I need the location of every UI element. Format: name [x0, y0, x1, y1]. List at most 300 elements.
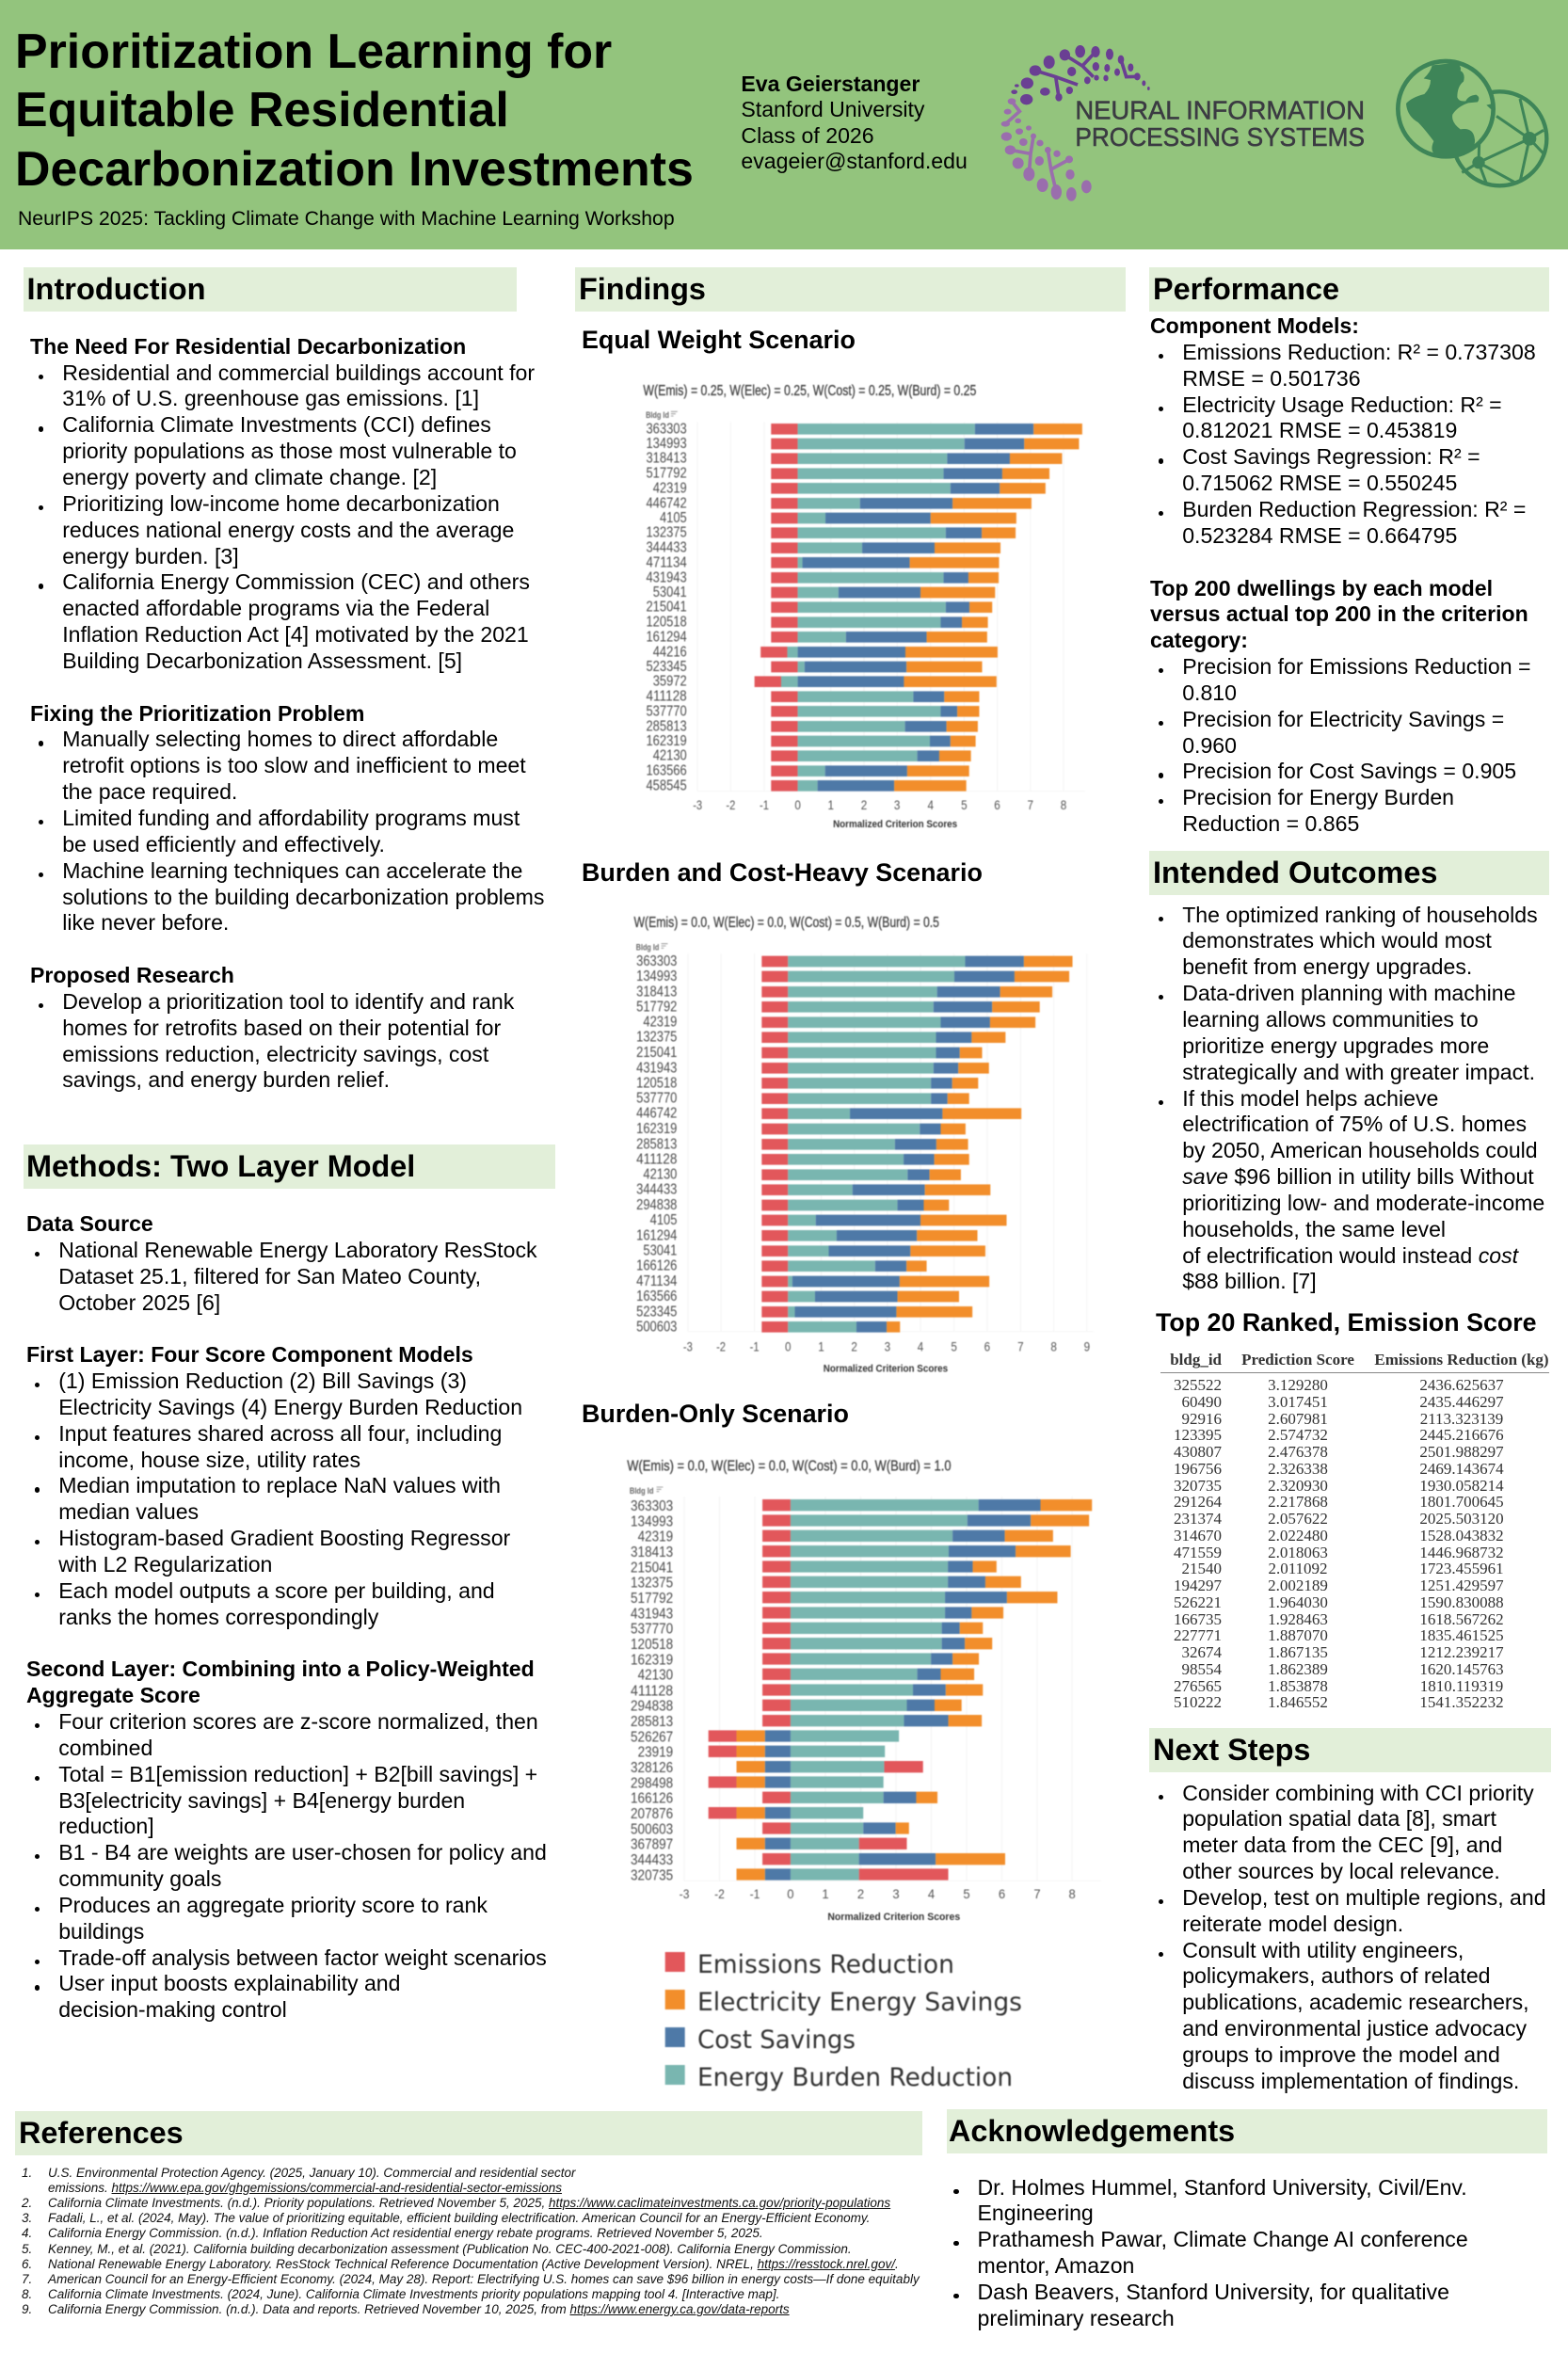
subheading: equal weight: Equal Weight Scenario: [582, 326, 856, 354]
chart: burden and cost-heavy stacked bars: -2: [716, 1339, 726, 1354]
chart: equal weight stacked bars: 2: [861, 798, 867, 813]
title: Equitable Residential: [15, 82, 509, 136]
text: acknowledgements list: [953, 2174, 1468, 2330]
table: top 20 emission scores: 92916: [1182, 1410, 1222, 1428]
chart: equal weight stacked bars: 42130: [653, 747, 687, 763]
chart: burden-only stacked bars: 42319: [638, 1529, 673, 1545]
heading: Introduction: [24, 267, 517, 311]
table: top 20 emission scores: 2.607981: [1268, 1410, 1328, 1428]
text: next steps list: policymakers, authors of related: [1182, 1963, 1491, 1988]
text: introduction content: like never before.: [62, 910, 229, 935]
heading: Next Steps: [1149, 1728, 1551, 1771]
text: performance metrics: Precision for Energy Burden: [1182, 785, 1454, 809]
chart: burden-only stacked bars: 0: [787, 1887, 794, 1902]
title: Decarbonization Investments: [15, 141, 694, 196]
text: reference list: California Energy Commission. (n.d.). Data and reports. Retrieved November 10, 2025, from https://www.energy.ca.gov/data-reports: [48, 2302, 790, 2316]
chart: equal weight stacked bars: [642, 382, 1083, 830]
text: performance metrics: Top 200 dwellings by each model: [1150, 576, 1493, 600]
chart: equal weight stacked bars: 8: [1061, 798, 1066, 813]
author block: [741, 72, 968, 173]
table: top 20 emission scores: 2436.625637: [1419, 1376, 1504, 1394]
text: reference list: [21, 2165, 920, 2316]
text: performance metrics: category:: [1150, 628, 1248, 652]
chart: burden and cost-heavy stacked bars: 8: [1050, 1339, 1057, 1354]
table: top 20 emission scores: 1541.352232: [1419, 1693, 1504, 1711]
text: next steps list: meter data from the CEC [9], and: [1182, 1833, 1502, 1857]
chart: burden and cost-heavy stacked bars: 7: [1017, 1339, 1024, 1354]
chart: burden-only stacked bars: 166126: [631, 1790, 673, 1806]
chart: burden and cost-heavy stacked bars: 215041: [636, 1044, 677, 1061]
text: acknowledgements list: mentor, Amazon: [977, 2253, 1134, 2278]
logo: NeurIPS: [1001, 45, 1365, 201]
heading: Introduction: Introduction: [26, 271, 205, 306]
text: performance metrics: versus actual top 200 in the criterion: [1150, 601, 1528, 626]
text: performance metrics: Cost Savings Regression: R² =: [1182, 444, 1480, 469]
panel: references: 7.: [22, 2272, 32, 2286]
chart: equal weight stacked bars: 458545: [646, 776, 687, 793]
text: introduction content: California Climate Investments (CCI) defines: [62, 412, 491, 437]
chart: burden and cost-heavy stacked bars: 431943: [636, 1059, 677, 1076]
text: performance metrics: Precision for Emissions Reduction =: [1182, 654, 1530, 679]
table: top 20 emission scores: 3.017451: [1268, 1393, 1328, 1411]
text: outcomes list: prioritizing low- and moderate-income: [1182, 1191, 1544, 1215]
chart: burden-only stacked bars: 328126: [631, 1759, 673, 1776]
table: top 20 emission scores: 1.887070: [1268, 1626, 1328, 1644]
table: top 20 emission scores: 2113.323139: [1420, 1410, 1503, 1428]
heading: References: References: [19, 2116, 184, 2150]
chart: equal weight stacked bars: 517792: [646, 465, 687, 481]
text: performance metrics: Reduction = 0.865: [1182, 811, 1359, 836]
text: performance metrics: RMSE = 0.501736: [1182, 366, 1361, 391]
title: [15, 24, 694, 196]
chart: equal weight stacked bars: 4: [928, 798, 934, 813]
text: methods content: Second Layer: Combining into a Policy-Weighted: [26, 1657, 535, 1681]
chart: burden and cost-heavy stacked bars: 0: [785, 1339, 791, 1354]
chart: equal weight stacked bars: 53041: [653, 584, 687, 600]
chart: equal weight stacked bars: 523345: [646, 658, 687, 675]
text: reference list: California Climate Investments. (n.d.). Priority populations. Retrieved November 5, 2025, https://www.caclimateinvestments.ca.gov/priority-populations: [48, 2196, 890, 2210]
author block: Eva Geierstanger: [741, 72, 920, 96]
table: top 20 emission scores: 98554: [1182, 1660, 1222, 1678]
text: introduction content: energy burden. [3]: [62, 544, 239, 568]
text: acknowledgements list: Dr. Holmes Hummel, Stanford University, Civil/Env.: [977, 2174, 1467, 2199]
chart: equal weight stacked bars: 163566: [646, 762, 687, 778]
text: methods content: Data Source: [26, 1211, 153, 1236]
text: introduction content: Limited funding and affordability programs must: [62, 806, 520, 830]
chart: burden-only stacked bars: W(Emis) = 0.0, W(Elec) = 0.0, W(Cost) = 0.0, W(Burd) = 1.0: [627, 1458, 952, 1474]
heading: References: [15, 2111, 922, 2155]
table: top 20 emission scores: 2501.988297: [1419, 1443, 1504, 1461]
chart: burden-only stacked bars: 5: [963, 1887, 970, 1902]
legend: Energy Burden Reduction: [697, 2063, 1013, 2092]
chart: burden and cost-heavy stacked bars: 363303: [636, 952, 677, 969]
chart: burden-only stacked bars: 526267: [631, 1728, 673, 1745]
chart: equal weight stacked bars: 35972: [653, 673, 687, 689]
table: top 20 emission scores: 1801.700645: [1419, 1493, 1504, 1511]
text: introduction content: Building Decarbonization Assessment. [5]: [62, 648, 462, 673]
chart: equal weight stacked bars: 6: [994, 798, 1000, 813]
legend: Electricity Energy Savings: [697, 1988, 1022, 2017]
text: performance metrics: 0.810: [1182, 680, 1237, 705]
panel: references: 3.: [22, 2211, 32, 2225]
text: next steps list: other sources by local relevance.: [1182, 1859, 1500, 1883]
chart: burden-only stacked bars: 2: [857, 1887, 864, 1902]
text: methods content: B3[electricity savings] + B4[energy burden: [58, 1788, 465, 1813]
chart: burden and cost-heavy stacked bars: 523345: [636, 1303, 677, 1320]
table: top 20 emission scores: 1.867135: [1268, 1643, 1328, 1661]
workshop subtitle: NeurIPS 2025: Tackling Climate Change with Machine Learning Workshop: [18, 208, 675, 230]
chart: equal weight stacked bars: 5: [961, 798, 968, 813]
text: reference list: Fadali, L., et al. (2024, May). The value of prioritizing equitable, efficient building electrification. American Council for an Energy-Efficient Economy.: [48, 2211, 870, 2225]
table: top 20 emission scores: 314670: [1174, 1527, 1222, 1545]
text: introduction content: Machine learning techniques can accelerate the: [62, 858, 522, 883]
chart: burden-only stacked bars: 8: [1069, 1887, 1076, 1902]
table: top 20 emission scores: 1.928463: [1268, 1610, 1328, 1628]
table: top 20 emission scores: 510222: [1174, 1693, 1222, 1711]
text: performance metrics: 0.812021 RMSE = 0.453819: [1182, 418, 1457, 442]
chart: burden-only stacked bars: 318413: [631, 1544, 673, 1561]
chart: equal weight stacked bars: W(Emis) = 0.25, W(Elec) = 0.25, W(Cost) = 0.25, W(Burd) = 0.25: [643, 382, 976, 399]
logo: NeurIPS: NEURAL INFORMATION: [1075, 96, 1365, 125]
text: reference list: California Energy Commission. (n.d.). Inflation Reduction Act residential energy rebate programs. Retrieved November 5, 2025.: [48, 2226, 763, 2240]
heading: Findings: Findings: [579, 272, 706, 306]
table: top 20 emission scores: 1930.058214: [1419, 1477, 1504, 1495]
table: top 20 emission scores: 3.129280: [1268, 1376, 1328, 1394]
chart: burden and cost-heavy stacked bars: 6: [984, 1339, 990, 1354]
text: next steps list: and environmental justice advocacy: [1182, 2016, 1527, 2041]
table: top 20 emission scores: 1618.567262: [1419, 1610, 1504, 1628]
text: performance metrics: 0.523284 RMSE = 0.664795: [1182, 523, 1457, 548]
text: introduction content: the pace required.: [62, 779, 237, 804]
chart: equal weight stacked bars: 471134: [646, 553, 687, 570]
chart: burden-only stacked bars: 207876: [631, 1805, 673, 1822]
text: performance metrics: 0.960: [1182, 733, 1237, 758]
table: top 20 emission scores: 1.862389: [1268, 1660, 1328, 1678]
chart: burden and cost-heavy stacked bars: 500603: [636, 1318, 677, 1335]
text: performance metrics: Precision for Electricity Savings =: [1182, 707, 1504, 731]
logo: NeurIPS: PROCESSING SYSTEMS: [1075, 122, 1365, 152]
table: top 20 emission scores: 1723.455961: [1419, 1560, 1504, 1577]
text: methods content: Input features shared across all four, including: [58, 1421, 502, 1446]
table: top 20 emission scores: 2.002189: [1268, 1577, 1328, 1594]
panel: references: 6.: [22, 2257, 32, 2271]
chart: burden-only stacked bars: 500603: [631, 1820, 673, 1837]
text: outcomes list: learning allows communities to: [1182, 1007, 1479, 1032]
text: outcomes list: by 2050, American households could: [1182, 1138, 1538, 1162]
table: top 20 emission scores: 291264: [1174, 1493, 1222, 1511]
chart: equal weight stacked bars: 215041: [646, 599, 687, 615]
chart: burden-only stacked bars: 162319: [631, 1651, 673, 1668]
heading: Performance: Performance: [1153, 272, 1339, 306]
table: top 20 emission scores: 231374: [1174, 1510, 1222, 1528]
table: top 20 emission scores: 1251.429597: [1419, 1577, 1504, 1594]
chart: burden and cost-heavy stacked bars: 3: [885, 1339, 890, 1354]
text: outcomes list: electrification of 75% of U.S. homes: [1182, 1112, 1527, 1136]
text: methods content: Electricity Savings (4) Energy Burden Reduction: [58, 1395, 522, 1419]
panel: next steps: [1149, 1728, 1551, 2093]
text: next steps list: reiterate model design.: [1182, 1912, 1403, 1936]
table: top 20 emission scores: 32674: [1182, 1643, 1222, 1661]
chart: burden and cost-heavy stacked bars: 134993: [636, 968, 677, 984]
table: top 20 emission scores: 2.217868: [1268, 1493, 1328, 1511]
text: methods content: buildings: [58, 1919, 144, 1944]
table: top 20 emission scores: 2.476378: [1268, 1443, 1328, 1461]
text: outcomes list: If this model helps achieve: [1182, 1086, 1438, 1111]
text: introduction content: savings, and energy burden relief.: [62, 1067, 390, 1092]
table: top 20 emission scores: 196756: [1174, 1460, 1222, 1478]
chart: equal weight stacked bars: 161294: [646, 628, 687, 645]
text: next steps list: groups to improve the model and: [1182, 2042, 1500, 2067]
chart: burden-only stacked bars: 363303: [631, 1497, 673, 1514]
text: introduction content: Manually selecting homes to direct affordable: [62, 727, 498, 751]
chart: burden and cost-heavy stacked bars: 285813: [636, 1135, 677, 1152]
table: top 20 emission scores: 2.018063: [1268, 1544, 1328, 1561]
text: reference list: California Climate Investments. (2024, June). California Climate Investments priority populations mapping tool 4. [Interactive map].: [48, 2287, 779, 2301]
chart: burden-only stacked bars: 3: [892, 1887, 900, 1902]
panel: top 20 table: [1156, 1308, 1549, 1711]
text: introduction content: Prioritizing low-income home decarbonization: [62, 491, 500, 516]
header banner: [0, 0, 1568, 248]
chart: equal weight stacked bars: 132375: [646, 524, 687, 540]
chart: burden-only stacked bars: 120518: [631, 1636, 673, 1653]
table: top 20 emission scores: 1.846552: [1268, 1693, 1328, 1711]
chart: burden and cost-heavy stacked bars: 344433: [636, 1181, 677, 1197]
chart: equal weight stacked bars: -3: [693, 798, 702, 813]
text: methods content: community goals: [58, 1866, 221, 1891]
text: reference list: Kenney, M., et al. (2021). California building decarbonization assessment (Publication No. CEC-400-2021-008). California Energy Commission.: [48, 2242, 852, 2256]
text: introduction content: Proposed Research: [30, 963, 234, 987]
table: top 20 emission scores: Prediction Score: [1241, 1351, 1354, 1369]
panel: introduction: [24, 267, 544, 1092]
table: top 20 emission scores: bldg_id: [1170, 1351, 1222, 1369]
legend: Cost Savings: [697, 2025, 856, 2055]
chart: burden-only stacked bars: Normalized Criterion Scores: [827, 1911, 960, 1923]
heading: Intended Outcomes: [1149, 851, 1549, 894]
legend: Emissions Reduction: [697, 1950, 954, 1979]
text: outcomes list: benefit from energy upgrades.: [1182, 954, 1472, 979]
table: top 20 emission scores: 1212.239217: [1419, 1643, 1504, 1661]
chart: burden and cost-heavy stacked bars: 4: [918, 1339, 923, 1354]
chart: burden-only stacked bars: 367897: [631, 1836, 673, 1852]
text: outcomes list: strategically and with greater impact.: [1182, 1060, 1535, 1084]
chart: burden-only stacked bars: 431943: [631, 1605, 673, 1622]
text: performance metrics: Burden Reduction Regression: R² =: [1182, 497, 1526, 521]
panel: methods: [24, 1144, 555, 2022]
panel: references: 2.: [22, 2196, 32, 2210]
chart: burden and cost-heavy stacked bars: 162319: [636, 1120, 677, 1137]
text: methods content: reduction]: [58, 1814, 154, 1838]
table: top 20 emission scores: 194297: [1174, 1577, 1222, 1594]
text: introduction content: energy poverty and climate change. [2]: [62, 465, 437, 489]
chart: burden-only stacked bars: 7: [1033, 1887, 1041, 1902]
chart: burden and cost-heavy stacked bars: Bldg Id: [636, 943, 659, 952]
chart: burden and cost-heavy stacked bars: 5: [951, 1339, 957, 1354]
author block: evageier@stanford.edu: [741, 149, 968, 173]
table: top 20 emission scores: 471559: [1174, 1544, 1222, 1561]
text: outcomes list: households, the same level: [1182, 1217, 1446, 1241]
logo: globe and network: [1396, 58, 1549, 188]
panel: references: 4.: [22, 2226, 32, 2240]
text: introduction content: 31% of U.S. greenhouse gas emissions. [1]: [62, 386, 479, 410]
panel: references: 5.: [22, 2242, 32, 2256]
chart: burden-only stacked bars: -3: [680, 1887, 689, 1902]
chart: burden-only stacked bars: 298498: [631, 1774, 673, 1791]
author block: Class of 2026: [741, 123, 874, 148]
table: top 20 emission scores: 123395: [1174, 1426, 1222, 1444]
text: methods content: User input boosts explainability and: [58, 1971, 401, 1995]
table: top 20 emission scores: 276565: [1174, 1677, 1222, 1694]
table: top 20 emission scores: 1.853878: [1268, 1677, 1328, 1694]
text: next steps list: population spatial data [8], smart: [1182, 1806, 1496, 1831]
text: introduction content: Fixing the Prioritization Problem: [30, 701, 364, 726]
text: acknowledgements list: Dash Beavers, Stanford University, for qualitative: [977, 2280, 1449, 2304]
table: top 20 emission scores: 2.022480: [1268, 1527, 1328, 1545]
text: next steps list: publications, academic researchers,: [1182, 1990, 1529, 2014]
text: methods content: income, house size, utility rates: [58, 1448, 360, 1472]
chart: burden-only stacked bars: [627, 1458, 1093, 1923]
text: performance metrics: Emissions Reduction: R² = 0.737308: [1182, 340, 1536, 364]
table: top 20 emission scores: 2.574732: [1268, 1426, 1328, 1444]
text: introduction content: priority populations as those most vulnerable to: [62, 439, 517, 463]
heading: Acknowledgements: Acknowledgements: [949, 2114, 1235, 2148]
chart: equal weight stacked bars: 411128: [646, 688, 687, 704]
chart: burden-only stacked bars: 4: [928, 1887, 935, 1902]
chart: burden and cost-heavy stacked bars: 517792: [636, 998, 677, 1015]
chart: burden-only stacked bars: 1: [822, 1887, 829, 1902]
chart: equal weight stacked bars: 44216: [653, 643, 687, 660]
text: reference list: American Council for an Energy-Efficient Economy. (2024, May 28). Report: Electrifying U.S. homes can save $96 billion in energy costs—If done equitably: [48, 2272, 920, 2286]
chart: burden and cost-heavy stacked bars: 318413: [636, 983, 677, 1000]
chart: burden-only stacked bars: 320735: [631, 1866, 673, 1883]
panel: findings: [575, 267, 1126, 2092]
chart: equal weight stacked bars: 0: [794, 798, 801, 813]
text: reference list: U.S. Environmental Protection Agency. (2025, January 10). Commercial and residential sector: [48, 2165, 576, 2180]
table: top 20 emission scores: 1590.830088: [1419, 1593, 1504, 1611]
text: methods content: Trade-off analysis between factor weight scenarios: [58, 1945, 547, 1970]
text: next steps list: Consult with utility engineers,: [1182, 1938, 1464, 1962]
title: Prioritization Learning for: [15, 24, 612, 78]
table: top 20 emission scores: [1160, 1351, 1549, 1711]
chart: burden and cost-heavy stacked bars: 42130: [643, 1166, 677, 1182]
text: methods content: Four criterion scores are z-score normalized, then: [58, 1709, 538, 1734]
text: outcomes list: demonstrates which would most: [1182, 928, 1492, 952]
panel: references: 8.: [22, 2287, 32, 2301]
panel: references: [15, 2111, 922, 2316]
text: methods content: Produces an aggregate priority score to rank: [58, 1893, 488, 1917]
chart: burden and cost-heavy stacked bars: W(Emis) = 0.0, W(Elec) = 0.0, W(Cost) = 0.5, W(Burd) = 0.5: [633, 914, 939, 931]
table: top 20 emission scores: 21540: [1182, 1560, 1222, 1577]
chart: burden and cost-heavy stacked bars: 163566: [636, 1288, 677, 1305]
chart: equal weight stacked bars: 134993: [646, 435, 687, 452]
text: outcomes list: The optimized ranking of households: [1182, 903, 1538, 927]
chart: equal weight stacked bars: 285813: [646, 717, 687, 734]
chart: equal weight stacked bars: 1: [828, 798, 834, 813]
chart: burden-only stacked bars: 134993: [631, 1513, 673, 1529]
text: outcomes list: prioritize energy upgrades more: [1182, 1033, 1489, 1058]
chart: equal weight stacked bars: 363303: [646, 420, 687, 437]
chart: burden-only stacked bars: -1: [750, 1887, 760, 1902]
chart: burden and cost-heavy stacked bars: 537770: [636, 1090, 677, 1106]
text: next steps list: [1159, 1781, 1546, 2093]
table: top 20 emission scores: 2.011092: [1268, 1560, 1328, 1577]
text: introduction content: Inflation Reduction Act [4] motivated by the 2021: [62, 622, 529, 647]
chart: burden and cost-heavy stacked bars: 166126: [636, 1257, 677, 1273]
table: top 20 emission scores: 166735: [1174, 1610, 1222, 1628]
chart: burden-only stacked bars: 42130: [638, 1667, 673, 1683]
chart: burden and cost-heavy stacked bars: 132375: [636, 1029, 677, 1045]
panel: references: 9.: [22, 2302, 32, 2316]
chart: burden and cost-heavy stacked bars: 161294: [636, 1226, 677, 1243]
chart: burden-only stacked bars: 411128: [631, 1682, 673, 1699]
text: introduction content: The Need For Residential Decarbonization: [30, 334, 466, 359]
chart: burden and cost-heavy stacked bars: 411128: [636, 1150, 677, 1167]
table: top 20 emission scores: 2.326338: [1268, 1460, 1328, 1478]
text: methods content: First Layer: Four Score Component Models: [26, 1342, 473, 1367]
text: outcomes list: Data-driven planning with machine: [1182, 981, 1515, 1005]
text: methods content: ranks the homes correspondingly: [58, 1605, 378, 1629]
text: introduction content: reduces national energy costs and the average: [62, 518, 514, 542]
table: top 20 emission scores: 60490: [1182, 1393, 1222, 1411]
panel: performance: [1149, 267, 1549, 836]
chart: burden-only stacked bars: 132375: [631, 1575, 673, 1591]
table: top 20 emission scores: 2.057622: [1268, 1510, 1328, 1528]
chart: equal weight stacked bars: 42319: [653, 479, 687, 496]
chart: burden-only stacked bars: 23919: [638, 1744, 673, 1760]
text: methods content: [26, 1211, 547, 2022]
text: reference list: emissions. https://www.epa.gov/ghgemissions/commercial-and-residential-sector-emissions: [48, 2181, 562, 2195]
heading: Methods: Methods: Two Layer Model: [26, 1149, 415, 1183]
chart: burden and cost-heavy stacked bars: 471134: [636, 1273, 677, 1289]
panel: intended outcomes: [1149, 851, 1549, 1293]
text: performance metrics: Precision for Cost Savings = 0.905: [1182, 759, 1516, 783]
heading: Performance: [1149, 267, 1549, 311]
chart: burden and cost-heavy stacked bars: 2: [851, 1339, 857, 1354]
chart: equal weight stacked bars: Bldg Id: [646, 411, 669, 421]
text: reference list: National Renewable Energy Laboratory. ResStock Technical Reference Documentation (Active Development Version). NREL, https://resstock.nrel.gov/.: [48, 2257, 899, 2271]
text: methods content: decision-making control: [58, 1997, 287, 2022]
chart: burden-only stacked bars: 285813: [631, 1713, 673, 1730]
legend: [664, 1950, 1022, 2092]
chart: burden and cost-heavy stacked bars: Normalized Criterion Scores: [824, 1362, 948, 1374]
chart: burden and cost-heavy stacked bars: 1: [818, 1339, 824, 1354]
chart: equal weight stacked bars: 344433: [646, 539, 687, 555]
chart: equal weight stacked bars: 431943: [646, 568, 687, 585]
text: outcomes list: $88 billion. [7]: [1182, 1269, 1317, 1293]
text: outcomes list: save $96 billion in utility bills Without: [1182, 1164, 1534, 1189]
table: top 20 emission scores: 526221: [1174, 1593, 1222, 1611]
text: methods content: combined: [58, 1736, 152, 1760]
chart: burden and cost-heavy stacked bars: -1: [750, 1339, 760, 1354]
chart: burden-only stacked bars: 294838: [631, 1698, 673, 1714]
table: top 20 emission scores: 1446.968732: [1419, 1544, 1504, 1561]
subheading: burden and cost-heavy: Burden and Cost-Heavy Scenario: [582, 858, 983, 887]
chart: equal weight stacked bars: 537770: [646, 702, 687, 719]
chart: burden-only stacked bars: 517792: [631, 1590, 673, 1607]
chart: equal weight stacked bars: 7: [1028, 798, 1033, 813]
chart: equal weight stacked bars: 4105: [660, 509, 687, 526]
chart: equal weight stacked bars: 162319: [646, 732, 687, 749]
table: top 20 emission scores: 2469.143674: [1419, 1460, 1504, 1478]
heading: Top 20 Ranked: Top 20 Ranked, Emission Score: [1156, 1308, 1537, 1337]
chart: equal weight stacked bars: -2: [726, 798, 735, 813]
author block: Stanford University: [741, 97, 924, 121]
chart: equal weight stacked bars: -1: [760, 798, 769, 813]
text: methods content: with L2 Regularization: [58, 1552, 272, 1577]
chart: burden-only stacked bars: 6: [999, 1887, 1005, 1902]
chart: burden and cost-heavy stacked bars: [632, 914, 1090, 1374]
text: introduction content: be used efficiently and effectively.: [62, 832, 385, 856]
panel: references: 1.: [22, 2165, 32, 2180]
